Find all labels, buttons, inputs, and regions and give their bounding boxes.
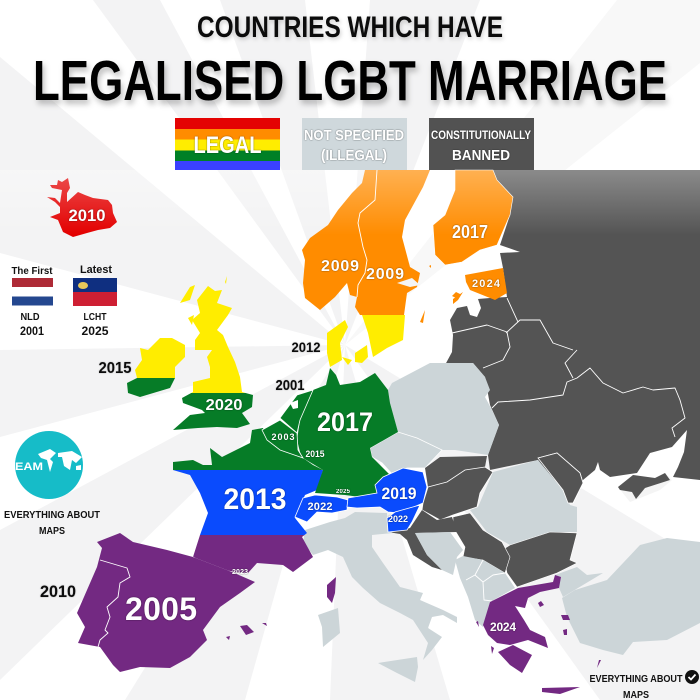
country year labels: 2015 <box>306 449 324 459</box>
Turkey <box>555 538 700 655</box>
Croatia <box>388 510 457 570</box>
country year labels: 2017 <box>452 222 488 242</box>
legend: constitutionally banned: CONSTITUTIONALLY <box>431 128 531 142</box>
bottom-right credit <box>590 670 699 700</box>
country year labels: 2010 <box>68 206 106 225</box>
Latest: Liechtenstein <box>73 264 117 338</box>
Switzerland <box>295 495 348 522</box>
The First: Netherlands: NLD <box>20 312 40 323</box>
title <box>33 11 667 113</box>
Denmark <box>327 320 368 367</box>
Moldova <box>538 453 583 503</box>
Corsica <box>327 577 336 603</box>
outside year labels: 2015 <box>98 360 132 377</box>
Sea of Azov shading <box>618 473 672 502</box>
Poland <box>388 363 499 455</box>
legend: legal rainbow <box>175 118 280 170</box>
country year labels: 2017 <box>317 407 373 437</box>
logo caption <box>4 509 101 537</box>
Serbia <box>453 513 510 573</box>
outside year labels <box>40 339 321 601</box>
The First: Netherlands: 2001 <box>20 324 44 338</box>
legend: not specified <box>302 118 407 170</box>
heading line 1: COUNTRIES WHICH HAVE <box>197 11 503 44</box>
country year labels: 2025 <box>336 489 351 495</box>
country year labels: 2024 <box>490 620 516 634</box>
logo caption: MAPS <box>39 525 65 537</box>
Latest: Liechtenstein: 2025 <box>82 324 109 338</box>
Italy <box>303 512 457 660</box>
country year labels: 2024 <box>472 278 501 290</box>
Bulgaria <box>502 532 577 587</box>
country year labels: 2013 <box>224 483 286 516</box>
Latest: Liechtenstein: LCHT <box>84 312 106 323</box>
country year labels: 2022 <box>388 514 408 524</box>
The First: Netherlands: The First <box>12 265 53 277</box>
Estonia <box>452 268 507 304</box>
outside year labels: 2010 <box>40 582 76 601</box>
Iceland <box>47 178 117 237</box>
country year labels: 2022 <box>308 501 332 513</box>
logo: Everything About Maps: EAM <box>15 461 43 473</box>
Greece <box>476 575 601 694</box>
Hungary <box>422 467 493 520</box>
legend <box>175 118 534 170</box>
legend: not specified: NOT SPECIFIED <box>304 127 404 144</box>
Spain and Portugal <box>77 533 267 672</box>
logo caption: EVERYTHING ABOUT <box>4 509 101 521</box>
country year labels: 2009 <box>366 266 404 283</box>
Latest: Liechtenstein: Latest <box>80 264 112 276</box>
icon: verified check <box>685 670 699 684</box>
Slovenia <box>387 505 420 532</box>
Crimea peninsula <box>618 473 670 499</box>
legend: constitutionally banned: BANNED <box>452 147 510 164</box>
top fade over map <box>0 170 700 235</box>
Czechia <box>370 432 442 475</box>
Norway and Sweden <box>302 170 431 357</box>
country year labels: 2023 <box>232 569 248 576</box>
country year labels: 2020 <box>206 397 243 414</box>
Great Britain <box>173 276 253 430</box>
Benelux <box>262 390 313 458</box>
outside year labels: 2012 <box>292 339 321 355</box>
first and latest flags <box>12 264 117 338</box>
France: green, blue and purple bands <box>173 428 323 573</box>
borders of eastern countries <box>452 298 685 503</box>
map of Europe <box>0 170 700 694</box>
legend: constitutionally banned <box>429 118 534 170</box>
country year labels <box>68 206 516 634</box>
bottom-right credit: EVERYTHING ABOUT <box>590 673 683 685</box>
country year labels: 2003 <box>272 432 294 442</box>
Germany <box>297 368 398 497</box>
Montenegro, Kosovo, Albania, North Macedonia <box>455 556 515 627</box>
Finland <box>433 170 513 265</box>
Slovakia <box>425 456 487 487</box>
Bosnia <box>415 532 463 575</box>
Ireland <box>127 338 185 397</box>
legend: not specified: (ILLEGAL) <box>321 147 387 164</box>
banned countries: Russia, Belarus, Ukraine, Baltics <box>445 170 700 503</box>
country year labels: 2019 <box>382 484 416 503</box>
logo: Everything About Maps <box>15 431 83 499</box>
The First: Netherlands <box>12 265 53 338</box>
legend: legal rainbow: LEGAL <box>194 132 262 159</box>
Sicily <box>378 657 418 682</box>
Austria and Liechtenstein <box>347 468 427 513</box>
Romania <box>470 460 577 545</box>
country year labels: 2009 <box>321 258 359 275</box>
country year labels: 2005 <box>125 591 197 627</box>
outside year labels: 2001 <box>276 377 304 394</box>
Sardinia <box>318 608 340 647</box>
